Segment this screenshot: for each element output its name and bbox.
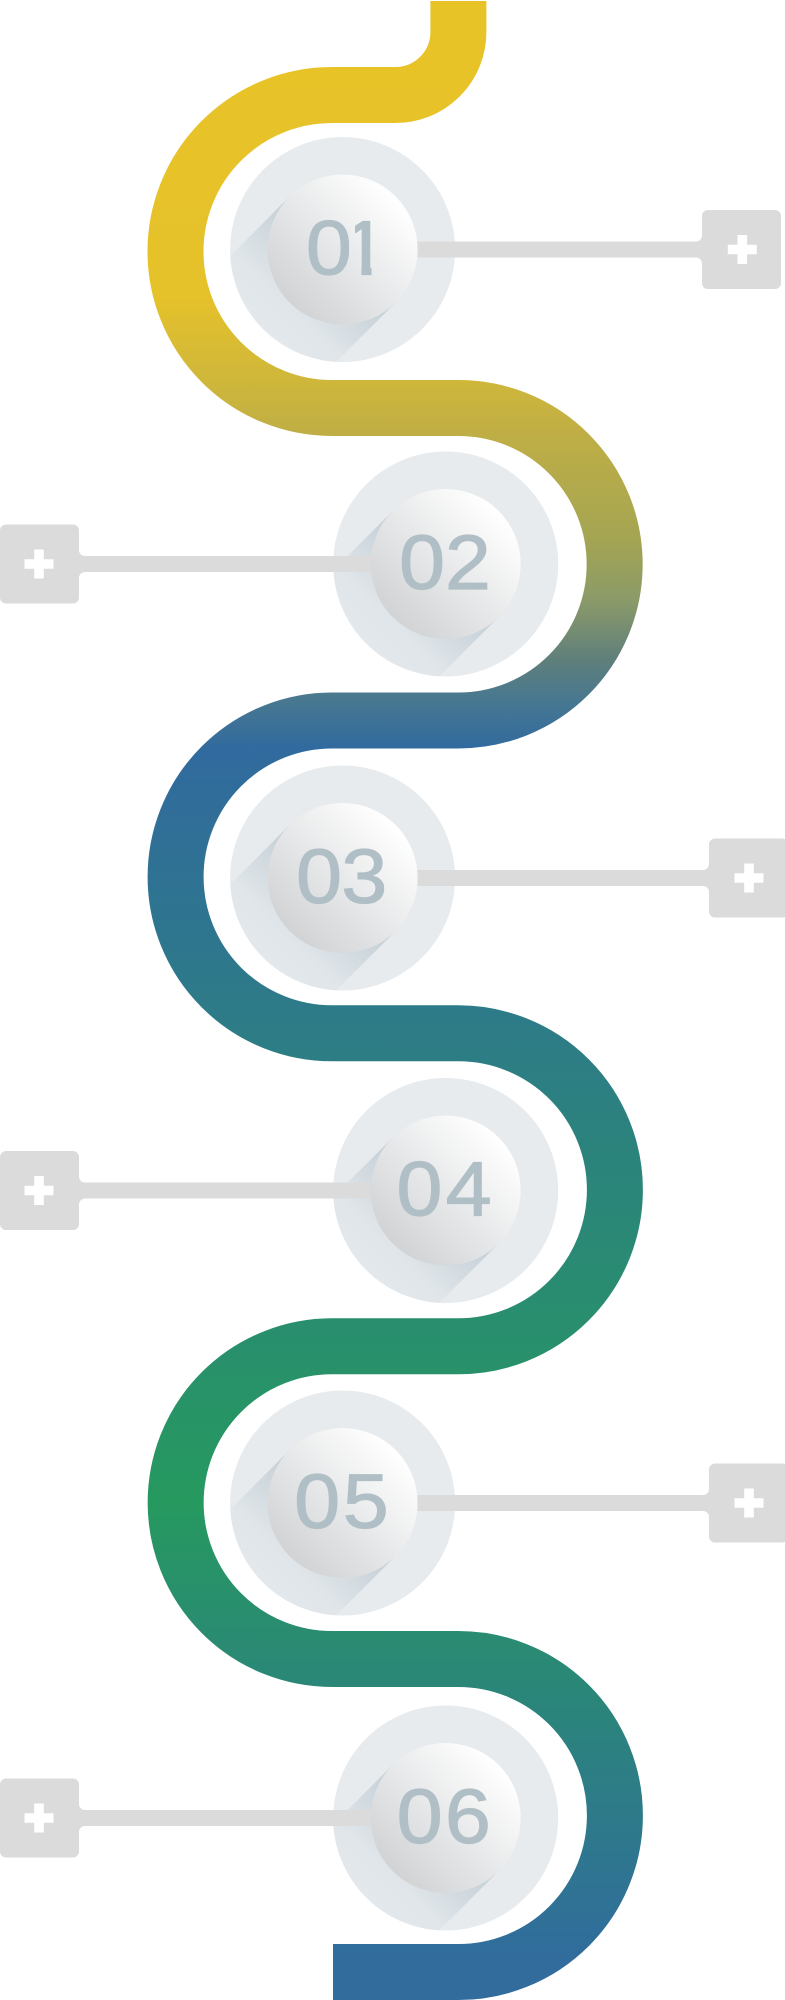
step 01 bbox=[230, 137, 781, 362]
number ball bbox=[268, 1428, 418, 1578]
icon: plus bbox=[734, 1488, 764, 1518]
icon: plus bbox=[24, 1176, 54, 1205]
connector and tab bbox=[0, 1778, 446, 1858]
step 02 bbox=[0, 452, 558, 676]
connector and tab bbox=[343, 838, 785, 918]
outer disc bbox=[230, 1390, 455, 1616]
number ball bbox=[371, 489, 521, 639]
long shadow bbox=[230, 825, 396, 990]
outer disc bbox=[333, 1706, 558, 1930]
step 06 bbox=[0, 1706, 558, 1930]
long shadow bbox=[333, 511, 499, 676]
icon: plus bbox=[728, 235, 757, 264]
icon: plus bbox=[24, 550, 54, 578]
number 01: 01 bbox=[306, 205, 387, 291]
long shadow bbox=[333, 1765, 499, 1930]
connector and tab bbox=[343, 1464, 785, 1542]
number 02: 02 bbox=[399, 519, 491, 605]
connector and tab bbox=[0, 1151, 446, 1230]
long shadow bbox=[333, 1138, 499, 1303]
winding gradient path bbox=[175, 1, 615, 1972]
outer disc bbox=[230, 137, 455, 362]
step 05 bbox=[230, 1390, 785, 1616]
icon: plus bbox=[734, 864, 764, 892]
outer disc bbox=[230, 766, 455, 990]
outer disc bbox=[333, 452, 558, 676]
number 03: 03 bbox=[296, 833, 387, 919]
long shadow bbox=[230, 1450, 396, 1615]
number ball bbox=[268, 174, 418, 324]
number ball bbox=[371, 1116, 521, 1266]
number ball bbox=[268, 803, 418, 953]
connector and tab bbox=[0, 524, 446, 604]
number 04: 04 bbox=[396, 1146, 492, 1232]
number ball bbox=[371, 1743, 521, 1893]
step 04 bbox=[0, 1078, 558, 1303]
number 05: 05 bbox=[294, 1458, 389, 1544]
long shadow bbox=[230, 196, 396, 362]
icon: plus bbox=[24, 1804, 54, 1832]
step 03 bbox=[230, 766, 785, 990]
connector and tab bbox=[343, 210, 781, 289]
outer disc bbox=[333, 1078, 558, 1303]
number 06: 06 bbox=[397, 1773, 491, 1859]
